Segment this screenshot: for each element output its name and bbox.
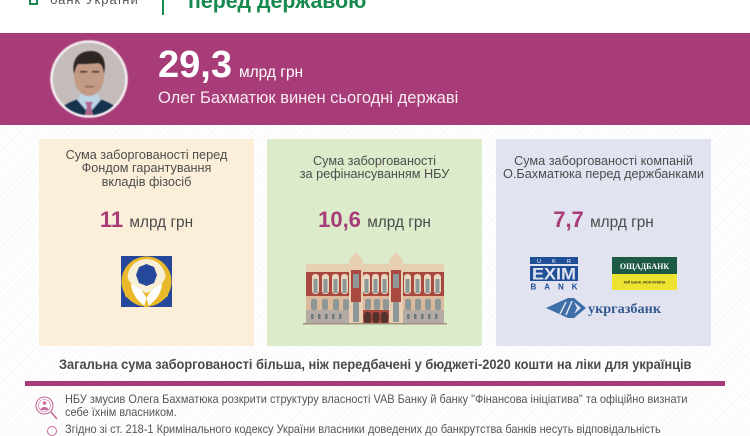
panel: state banks xyxy=(496,139,711,346)
card heading: за рефінансуванням НБУ xyxy=(300,167,449,181)
amount: 7,7 млрд грн xyxy=(553,207,654,232)
card heading xyxy=(300,154,450,181)
card heading xyxy=(66,148,228,189)
card heading: Фондом гарантування xyxy=(82,161,211,175)
icon: Oschadbank logo: ОЩАДБАНК xyxy=(620,262,669,271)
divider bar xyxy=(25,381,725,386)
icon: magnifier with person xyxy=(36,396,58,420)
icon: Ukreximbank logo: UKR xyxy=(537,259,571,265)
total amount: 29,3 млрд грн xyxy=(158,44,303,86)
header divider xyxy=(162,0,164,15)
icon: Oschadbank logo xyxy=(612,257,677,290)
note: ownership disclosure xyxy=(65,393,687,419)
card heading xyxy=(503,154,704,181)
card heading: вкладів фізосіб xyxy=(102,175,191,189)
header xyxy=(0,0,750,33)
card heading: Сума заборгованості компаній xyxy=(514,154,693,168)
panel: NBU refinancing xyxy=(267,139,482,346)
icon: Ukrgasbank logo: укргазбанк xyxy=(588,302,662,317)
icon: Ukreximbank logo xyxy=(530,257,578,290)
banner caption: Олег Бахматюк винен сьогодні державі xyxy=(158,89,458,107)
panel: total debt banner xyxy=(0,33,750,125)
note: ownership disclosure: себе їхнім власником. xyxy=(65,406,177,419)
icon: second note marker xyxy=(47,426,57,436)
summary sentence: Загальна сума заборгованості більша, ніж передбачені у бюджеті-2020 кошти на ліки для українців xyxy=(59,357,691,372)
note: criminal code: Згідно зі ст. 218-1 Кримінального кодексу України власники доведених до банкрутства банків несуть відповідальність xyxy=(65,423,661,436)
icon: fund logo xyxy=(121,256,172,307)
note: ownership disclosure: НБУ змусив Олега Бахматюка розкрити структуру власності VAB Банку й банку "Фінансова ініціатива" та офіційно визнати xyxy=(65,393,687,406)
card heading: Сума заборгованості перед xyxy=(66,148,227,162)
card heading: О.Бахматюка перед держбанками xyxy=(503,167,704,181)
card heading: Сума заборгованості xyxy=(313,154,436,168)
icon: Ukrgasbank logo xyxy=(546,298,662,318)
portrait photo xyxy=(50,40,128,118)
icon: bank logo mark xyxy=(29,0,38,5)
panel: deposit guarantee fund xyxy=(39,139,254,346)
icon: Ukreximbank logo: EXIM xyxy=(532,264,576,284)
amount: 10,6 млрд грн xyxy=(318,207,431,232)
icon: Oschadbank logo: МІЙ БАНК. МОЯ КРАЇНА xyxy=(624,280,666,284)
background pattern xyxy=(0,125,750,430)
icon: NBU building xyxy=(303,252,447,324)
amount: 11 млрд грн xyxy=(100,207,193,232)
